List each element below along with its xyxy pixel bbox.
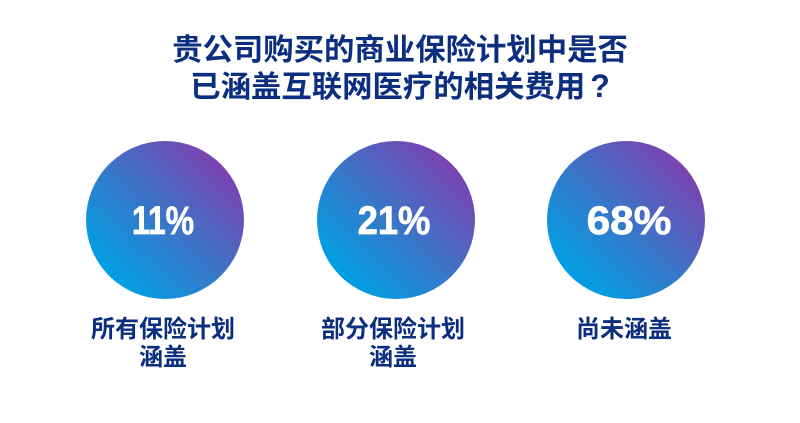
circle: 21%: 21% xyxy=(358,199,430,243)
circle: 68%: 68% xyxy=(587,199,671,243)
label: some plans covered: 涵盖 xyxy=(369,344,417,371)
label: all plans covered: 涵盖 xyxy=(139,344,187,371)
circle: 11%: 11% xyxy=(132,199,194,243)
label: all plans covered xyxy=(91,316,235,371)
circle: 11% xyxy=(86,141,244,299)
label: not yet covered: 尚未涵盖 xyxy=(576,316,672,343)
circle: 21% xyxy=(317,141,475,299)
label: some plans covered xyxy=(321,316,465,371)
label: some plans covered: 部分保险计划 xyxy=(321,316,465,343)
circle: 68% xyxy=(547,141,705,299)
title: 已涵盖互联网医疗的相关费用? xyxy=(190,68,610,104)
title: 贵公司购买的商业保险计划中是否 xyxy=(172,33,628,67)
title xyxy=(172,33,628,104)
label: all plans covered: 所有保险计划 xyxy=(91,316,235,343)
